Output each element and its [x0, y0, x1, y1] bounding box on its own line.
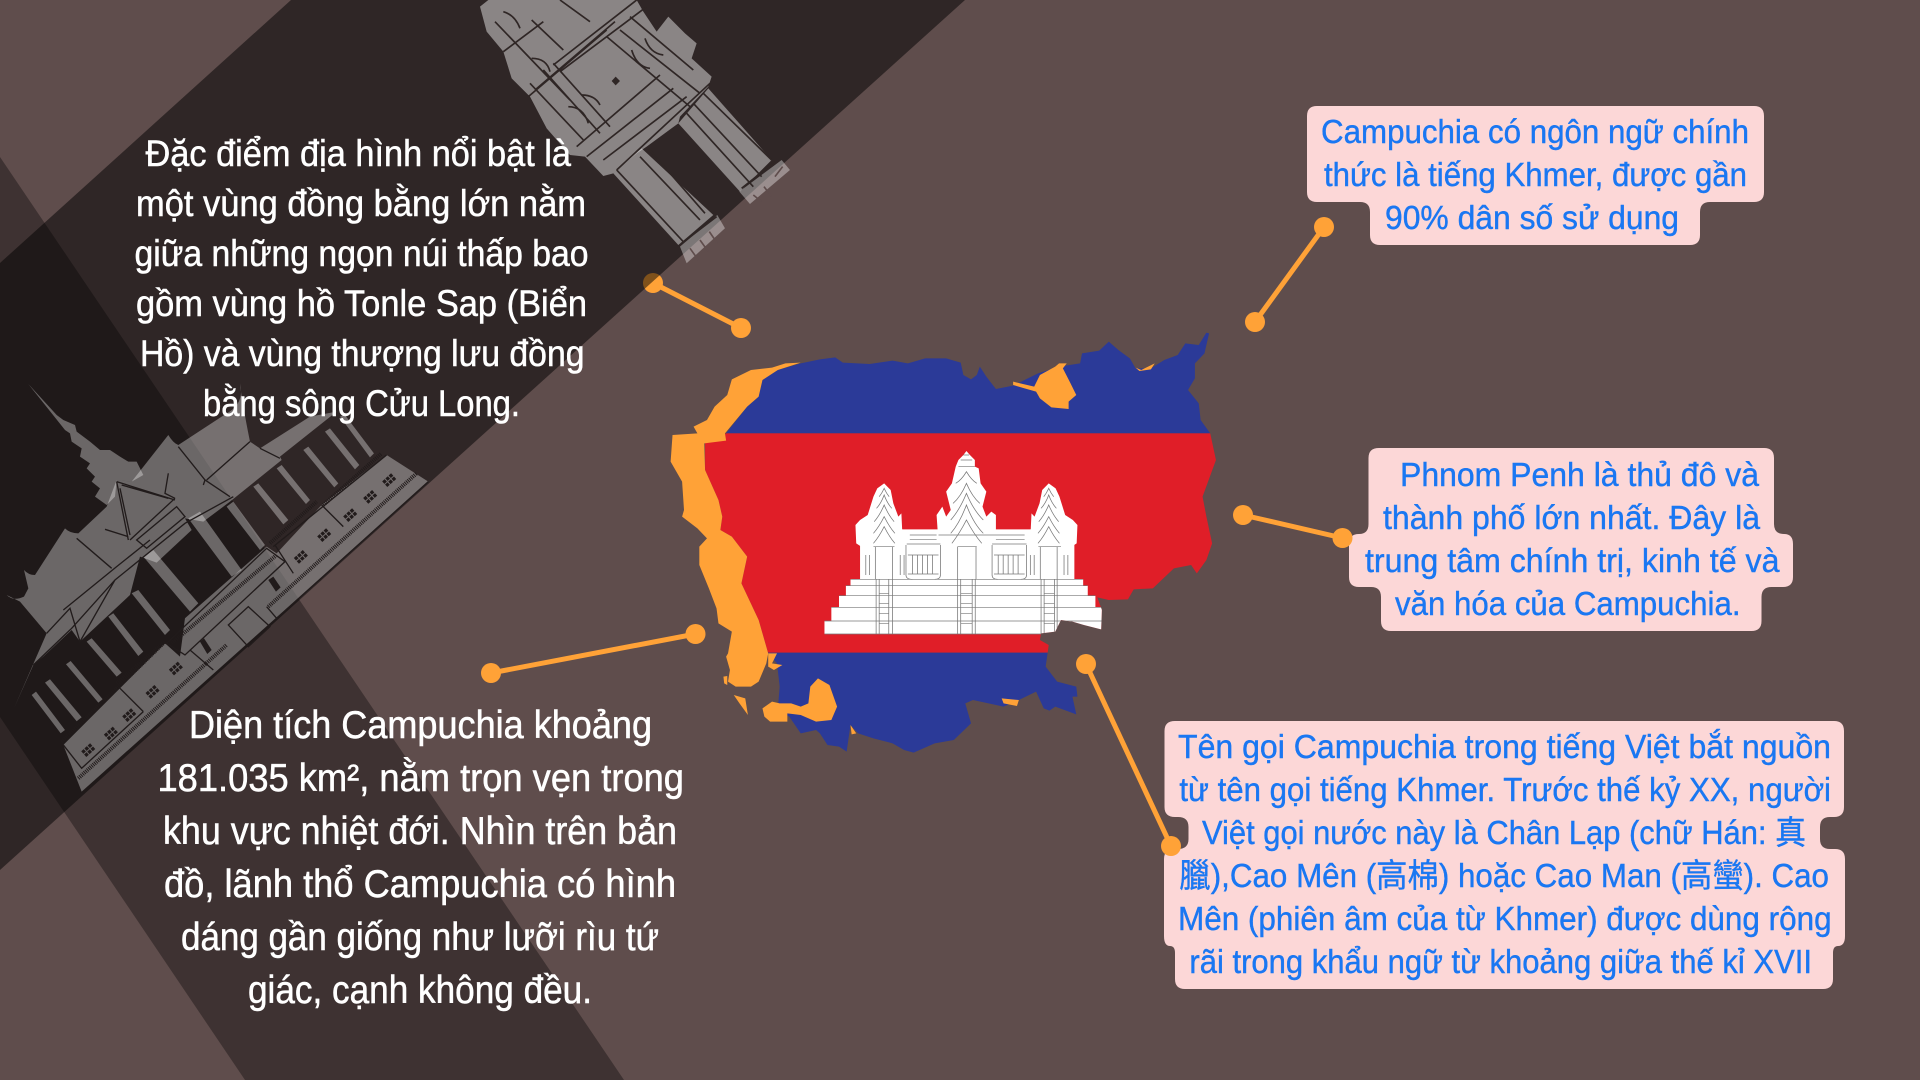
palace wall and base [63, 455, 428, 792]
emblem towers [855, 451, 1078, 546]
diagonal dark band from top right to left [0, 0, 965, 870]
callout: language [1307, 106, 1764, 245]
connector: terrain text to map [643, 273, 751, 338]
callout: name origin: Tên gọi Campuchia trong tiếng Việt bắt nguồn [1178, 728, 1831, 765]
text block: area: giác, cạnh không đều. [248, 969, 592, 1012]
text block: area: dáng gần giống như lưỡi rìu tứ [181, 916, 659, 959]
flag fill clipped to country [705, 332, 1216, 752]
callout: capital: trung tâm chính trị, kinh tế và [1365, 542, 1780, 579]
palace spire [28, 384, 143, 505]
text block: area: đồ, lãnh thổ Campuchia có hình [164, 863, 676, 906]
diagonal dark band from top left to bottom [0, 157, 624, 1080]
illustration: royal palace [7, 383, 428, 792]
callout: name origin: 臘),Cao Mên (高棉) hoặc Cao Man (高蠻). Cao [1179, 857, 1829, 894]
text block: terrain: Hồ) và vùng thượng lưu đồng [140, 333, 584, 374]
callout: language: thức là tiếng Khmer, được gần [1324, 156, 1747, 193]
orange highlighted provinces [671, 363, 1155, 734]
text block: terrain: giữa những ngọn núi thấp bao [134, 233, 588, 274]
illustration: temple tower top [480, 0, 790, 263]
callout: language: Campuchia có ngôn ngữ chính [1321, 113, 1749, 150]
connector: language callout [1245, 217, 1334, 332]
emblem galleries [860, 529, 1074, 579]
callout: capital: thành phố lớn nhất. Đây là [1383, 499, 1761, 536]
text block: terrain: bằng sông Cửu Long. [203, 383, 520, 424]
connector: area text to map [481, 624, 706, 683]
callout: name origin: từ tên gọi tiếng Khmer. Trước thế kỷ XX, người [1179, 771, 1831, 808]
Angkor Wat emblem [824, 451, 1102, 634]
text block: terrain: Đặc điểm địa hình nổi bật là [146, 133, 571, 174]
callout: name origin: Việt gọi nước này là Chân Lạp (chữ Hán: 真 [1202, 814, 1806, 851]
text block: terrain [134, 133, 588, 424]
text block: area [158, 704, 684, 1012]
callout: name origin [1161, 721, 1845, 989]
emblem steps [824, 579, 1102, 634]
text block: area: 181.035 km², nằm trọn vẹn trong [158, 757, 684, 800]
text block: area: khu vực nhiệt đới. Nhìn trên bản [163, 810, 677, 853]
callout: language: 90% dân số sử dụng [1385, 199, 1679, 236]
callout: name origin: Mên (phiên âm của từ Khmer) được dùng rộng [1178, 900, 1832, 937]
callout: capital: văn hóa của Campuchia. [1395, 585, 1740, 622]
callout: name origin: rãi trong khẩu ngữ từ khoảng giữa thế kỉ XVII [1189, 943, 1812, 980]
connector: capital callout [1233, 505, 1342, 538]
callout: capital: Phnom Penh là thủ đô và [1400, 456, 1760, 493]
callout: capital [1332, 448, 1793, 631]
map of Cambodia with flag [671, 320, 1233, 759]
palace roof [7, 383, 337, 708]
text block: terrain: một vùng đồng bằng lớn nằm [136, 183, 586, 224]
text block: terrain: gồm vùng hồ Tonle Sap (Biển [136, 283, 587, 324]
palace columns [32, 415, 374, 733]
emblem line work [824, 455, 1102, 634]
connector: name origin callout [1076, 654, 1171, 846]
text block: area: Diện tích Campuchia khoảng [189, 704, 652, 747]
